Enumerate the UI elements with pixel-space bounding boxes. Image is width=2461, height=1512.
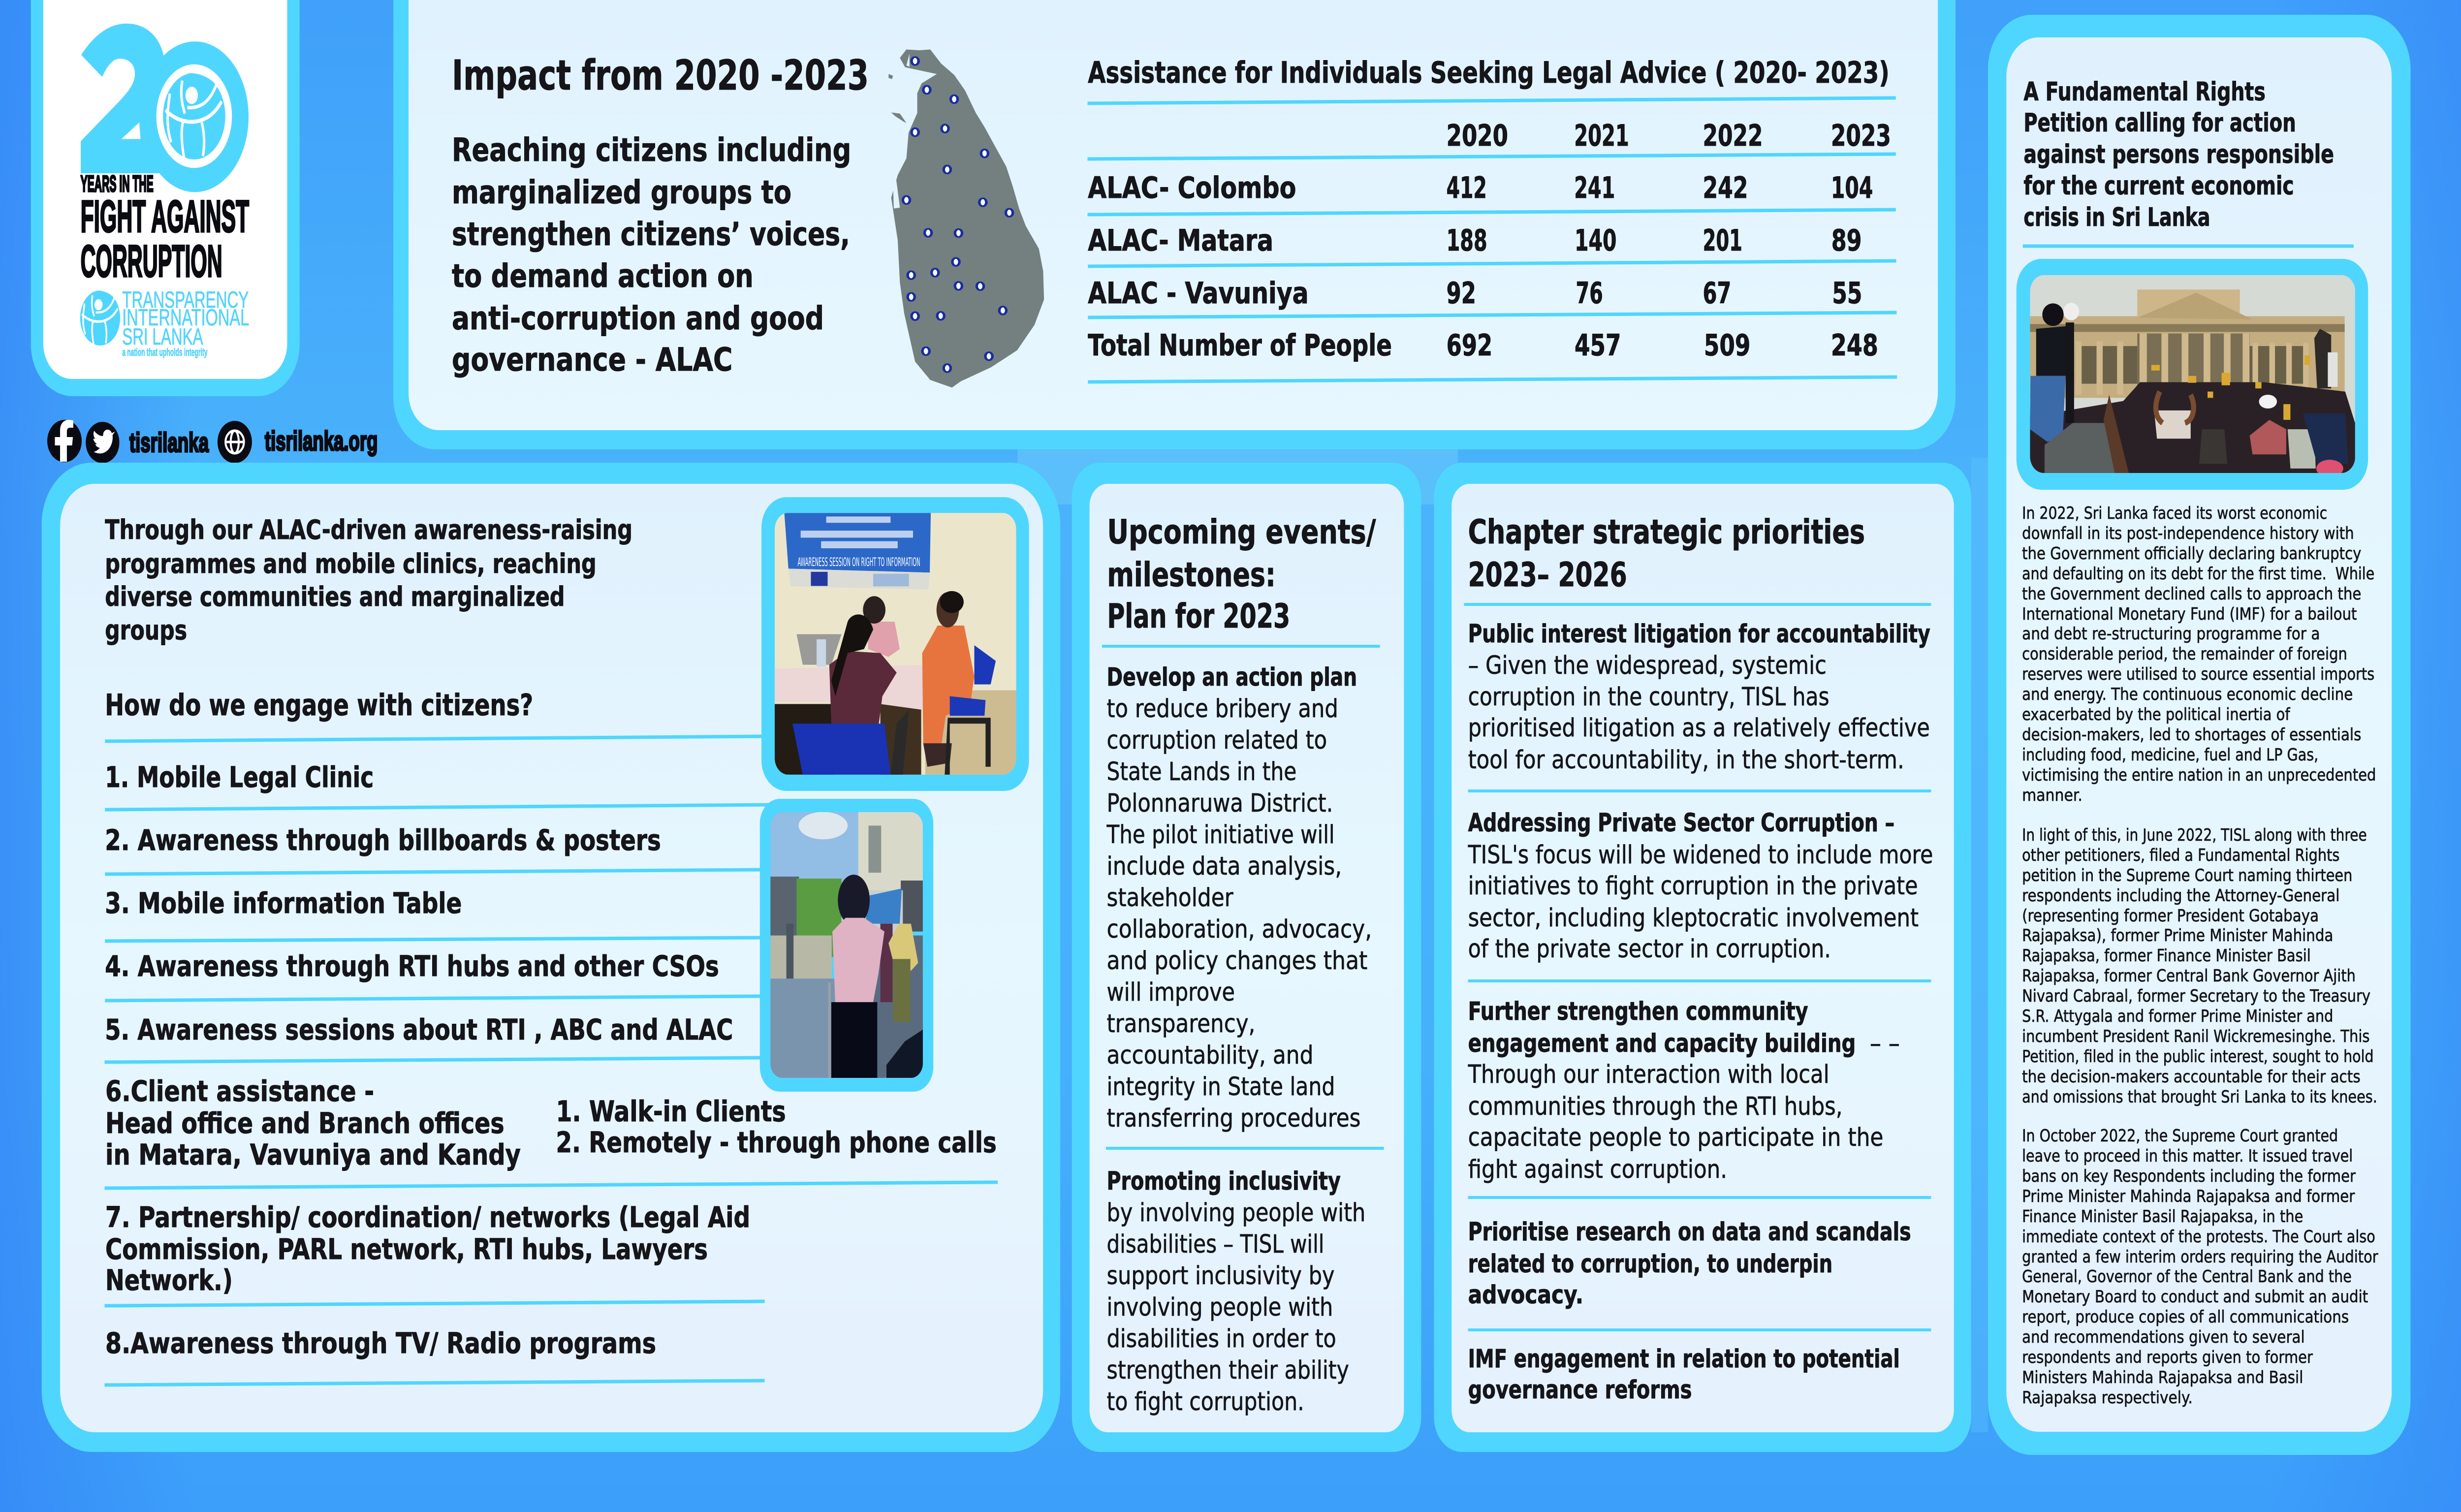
row: Vavuniya xyxy=(1088,276,1862,310)
text block: action plan: corruption related to xyxy=(1107,725,1327,755)
text block: action plan: collaboration, advocacy, xyxy=(1107,914,1372,944)
panel: upcoming events xyxy=(1072,463,1421,1452)
list: engagement channels: 4. Awareness through RTI hubs and other CSOs xyxy=(105,950,719,983)
text block: October 2022 ruling: Finance Minister Basil Rajapaksa, in the xyxy=(2022,1207,2303,1227)
text block: economic downfall: considerable period, the remainder of foreign xyxy=(2022,644,2347,664)
logo: 20 years: FIGHT AGAINST xyxy=(81,191,249,242)
social links xyxy=(47,420,378,463)
row: Matara: ALAC- Matara xyxy=(1088,223,1273,257)
priority: community engagement: Through our interaction with local xyxy=(1468,1060,1830,1089)
text block: intro xyxy=(105,514,632,646)
text block: action plan: transparency, xyxy=(1107,1009,1255,1038)
list: engagement channels: Head office and Branch offices xyxy=(105,1107,505,1140)
text block: promoting inclusivity: involving people with xyxy=(1107,1292,1333,1322)
list: engagement channels: 5. Awareness sessions about RTI , ABC and ALAC xyxy=(105,1013,733,1046)
list: engagement channels: in Matara, Vavuniya and Kandy xyxy=(105,1138,521,1171)
heading: petition: crisis in Sri Lanka xyxy=(2023,203,2210,232)
heading: upcoming events: milestones: xyxy=(1107,555,1276,594)
priority: IMF engagement: IMF engagement in relation to potential xyxy=(1468,1344,1900,1373)
list: engagement channels: 7. Partnership/ coordination/ networks (Legal Aid xyxy=(105,1201,750,1234)
text block: June 2022 petition: other petitioners, filed a Fundamental Rights xyxy=(2022,846,2339,865)
heading: impact: Impact from 2020 -2023 xyxy=(452,52,869,100)
website: tisrilanka.org xyxy=(265,426,378,456)
text block: October 2022 ruling: Ministers Mahinda Rajapaksa and Basil xyxy=(2022,1368,2303,1387)
text block: October 2022 ruling: Monetary Board to conduct and submit an audit xyxy=(2022,1287,2368,1307)
text block: economic downfall: and debt re-structuring programme for a xyxy=(2022,624,2320,644)
text block: economic downfall: In 2022, Sri Lanka faced its worst economic xyxy=(2022,504,2327,523)
text block: reaching citizens: Reaching citizens including xyxy=(452,131,851,168)
heading: chapter priorities xyxy=(1468,512,1865,594)
text block: reaching citizens xyxy=(452,131,851,378)
heading: how do we engage: How do we engage with citizens? xyxy=(105,688,533,722)
text block: October 2022 ruling: Rajapaksa respectively. xyxy=(2022,1388,2193,1408)
text block: reaching citizens: to demand action on xyxy=(452,257,754,294)
row: Vavuniya: 92 xyxy=(1447,276,1476,310)
text block: economic downfall: the Government officially declaring bankruptcy xyxy=(2022,544,2361,564)
row: total: 457 xyxy=(1575,328,1621,362)
row: Colombo: 104 xyxy=(1831,170,1873,205)
text block: October 2022 ruling: and recommendations given to several xyxy=(2022,1327,2305,1347)
text block: intro: Through our ALAC-driven awareness-raising xyxy=(105,514,632,545)
heading: chapter priorities: 2023– 2026 xyxy=(1468,555,1627,594)
heading: chapter priorities: Chapter strategic priorities xyxy=(1468,512,1865,551)
heading: petition xyxy=(2023,77,2334,232)
row: Colombo: 241 xyxy=(1574,170,1615,205)
text block: promoting inclusivity: Promoting inclusivity xyxy=(1107,1166,1341,1196)
text block: action plan: and policy changes that xyxy=(1107,946,1367,975)
row: Matara: 201 xyxy=(1703,223,1742,257)
text block: October 2022 ruling: granted a few interim orders requiring the Auditor xyxy=(2022,1247,2378,1267)
text block: intro: groups xyxy=(105,615,187,646)
text block: June 2022 petition: Rajapaksa, former Finance Minister Basil xyxy=(2022,946,2311,966)
priority: research: advocacy. xyxy=(1468,1280,1583,1309)
text block: action plan: State Lands in the xyxy=(1107,757,1296,786)
text block: promoting inclusivity: to fight corruption. xyxy=(1107,1387,1304,1416)
logo: 20 years: YEARS IN THE xyxy=(81,171,154,196)
text block: action plan: accountability, and xyxy=(1107,1040,1313,1070)
text block: promoting inclusivity: strengthen their ability xyxy=(1107,1355,1349,1385)
text block: October 2022 ruling: respondents and reports given to former xyxy=(2022,1348,2313,1367)
priority: public interest litigation: tool for accountability, in the short-term. xyxy=(1468,745,1904,774)
priority: public interest litigation xyxy=(1468,619,1930,774)
priority: IMF engagement xyxy=(1468,1344,1900,1404)
text block: action plan: Develop an action plan xyxy=(1107,662,1357,692)
priority: public interest litigation: Public interest litigation for accountability xyxy=(1468,619,1930,648)
row: total xyxy=(1088,328,1878,362)
priority: private sector corruption: of the private sector in corruption. xyxy=(1468,934,1831,963)
table header xyxy=(1447,118,1891,153)
priority: private sector corruption: TISL's focus will be widened to include more xyxy=(1468,840,1933,869)
text block: action plan: transferring procedures xyxy=(1107,1103,1360,1133)
row: Vavuniya: 67 xyxy=(1703,276,1731,310)
text block: economic downfall: downfall in its post-independence history with xyxy=(2022,524,2354,543)
row: Vavuniya: ALAC - Vavuniya xyxy=(1088,276,1309,310)
row: Matara: 188 xyxy=(1447,223,1487,257)
photo: mobile legal clinic xyxy=(761,497,1029,791)
list: engagement channels: Commission, PARL network, RTI hubs, Lawyers xyxy=(105,1233,708,1266)
text block: June 2022 petition: Petition, filed in the public interest, sought to hold xyxy=(2022,1047,2374,1067)
text block: promoting inclusivity: disabilities in order to xyxy=(1107,1324,1336,1353)
text block: action plan: will improve xyxy=(1107,977,1235,1007)
table header: 2020 xyxy=(1447,118,1508,153)
priority: private sector corruption: sector, including kleptocratic involvement xyxy=(1468,903,1919,932)
panel: engagement with citizens xyxy=(42,463,1060,1452)
text block: June 2022 petition: the decision-makers accountable for their acts xyxy=(2022,1067,2361,1087)
row: total: 509 xyxy=(1704,328,1750,362)
panel: fundamental rights petition xyxy=(1988,15,2410,1455)
priority: community engagement: Further strengthen community xyxy=(1468,997,1808,1026)
text block: June 2022 petition: incumbent President Ranil Wickremesinghe. This xyxy=(2022,1027,2369,1046)
text block: October 2022 ruling: report, produce copies of all communications xyxy=(2022,1307,2349,1327)
photo: protest at presidential secretariat xyxy=(2017,259,2368,490)
heading: upcoming events xyxy=(1107,512,1376,635)
panel: logo xyxy=(31,0,300,396)
text block: reaching citizens: governance - ALAC xyxy=(452,341,732,378)
list: engagement channels: 8.Awareness through TV/ Radio programs xyxy=(105,1327,656,1360)
row: Colombo: 412 xyxy=(1447,170,1487,205)
text block: action plan: The pilot initiative will xyxy=(1106,820,1335,849)
text block: October 2022 ruling xyxy=(2022,1126,2378,1408)
text block: economic downfall: the Government declined calls to approach the xyxy=(2022,584,2361,604)
logo: Transparency International Sri Lanka: INTERNATIONAL xyxy=(122,305,249,331)
icon: globe xyxy=(218,421,252,463)
list: engagement channels xyxy=(105,761,997,1360)
text block: action plan: stakeholder xyxy=(1107,883,1234,912)
text block: action plan: to reduce bribery and xyxy=(1107,694,1338,723)
row: Vavuniya: 55 xyxy=(1832,276,1862,310)
text block: action plan: integrity in State land xyxy=(1107,1072,1335,1101)
logo: 20 years xyxy=(81,24,249,286)
row: Matara: 89 xyxy=(1831,223,1862,257)
table header: 2022 xyxy=(1703,118,1763,153)
row: total: 248 xyxy=(1831,328,1878,362)
priority: community engagement: fight against corruption. xyxy=(1468,1155,1727,1184)
text block: economic downfall: manner. xyxy=(2022,786,2082,805)
row: Colombo xyxy=(1088,170,1873,205)
photo: awareness at office xyxy=(760,799,933,1092)
text block: economic downfall: victimising the entire nation in an unprecedented xyxy=(2022,765,2376,785)
text block: promoting inclusivity xyxy=(1107,1166,1365,1416)
priority: public interest litigation: corruption in the country, TISL has xyxy=(1468,682,1830,711)
text block: intro: diverse communities and marginalized xyxy=(105,581,565,612)
priority: private sector corruption xyxy=(1468,808,1933,963)
text block: economic downfall: including food, medicine, fuel and LP Gas, xyxy=(2022,745,2318,765)
text block: October 2022 ruling: immediate context of the protests. The Court also xyxy=(2022,1227,2375,1247)
list: engagement channels: 6.Client assistance - xyxy=(105,1075,374,1108)
row: Matara: 140 xyxy=(1575,223,1617,257)
heading: petition: Petition calling for action xyxy=(2023,108,2296,138)
row: Vavuniya: 76 xyxy=(1576,276,1603,310)
text block: October 2022 ruling: Prime Minister Mahinda Rajapaksa and former xyxy=(2022,1187,2355,1206)
map: Sri Lanka with ALAC points xyxy=(888,49,1044,388)
text block: economic downfall: International Monetary Fund (IMF) for a bailout xyxy=(2022,604,2357,624)
text block: June 2022 petition: Rajapaksa, former Central Bank Governor Ajith xyxy=(2022,966,2356,986)
text block: October 2022 ruling: bans on key Respondents including the former xyxy=(2022,1166,2356,1186)
table header: 2021 xyxy=(1574,118,1629,153)
panel: chapter strategic priorities xyxy=(1434,463,1971,1452)
text block: action plan: include data analysis, xyxy=(1107,851,1342,881)
table: assistance for individuals xyxy=(1087,55,1897,382)
priority: community engagement: engagement and capacity building xyxy=(1468,1029,1856,1058)
row: Matara xyxy=(1088,223,1862,257)
panel: impact 2020-2023 xyxy=(393,0,1956,449)
text block: October 2022 ruling: leave to proceed in this matter. It issued travel xyxy=(2022,1146,2353,1166)
text block: June 2022 petition: and omissions that brought Sri Lanka to its knees. xyxy=(2022,1087,2377,1107)
list: engagement channels: Network.) xyxy=(105,1264,233,1297)
text block: economic downfall: and energy. The continuous economic decline xyxy=(2022,685,2353,704)
logo: Transparency International Sri Lanka: TRANSPARENCY xyxy=(122,287,249,313)
text block: June 2022 petition xyxy=(2022,825,2377,1107)
text block: economic downfall xyxy=(2022,504,2376,805)
heading: petition: A Fundamental Rights xyxy=(2023,77,2266,107)
text block: intro: programmes and mobile clinics, reaching xyxy=(105,548,597,579)
heading: upcoming events: Upcoming events/ xyxy=(1107,512,1376,551)
text block: reaching citizens: anti-corruption and good xyxy=(452,300,824,337)
table header: 2023 xyxy=(1831,118,1891,153)
list: engagement channels: 2. Remotely - through phone calls xyxy=(556,1126,997,1159)
priority: community engagement: – – xyxy=(1870,1029,1900,1058)
text block: economic downfall: exacerbated by the political inertia of xyxy=(2022,705,2291,724)
text block: October 2022 ruling: In October 2022, the Supreme Court granted xyxy=(2022,1126,2338,1146)
text block: June 2022 petition: S.R. Attygala and former Prime Minister and xyxy=(2022,1007,2333,1026)
priority: IMF engagement: governance reforms xyxy=(1468,1375,1692,1404)
priority: private sector corruption: initiatives to fight corruption in the private xyxy=(1468,871,1918,900)
list: engagement channels: 1. Mobile Legal Clinic xyxy=(105,761,374,794)
text block: promoting inclusivity: disabilities – TISL will xyxy=(1107,1229,1324,1259)
text block: promoting inclusivity: support inclusivity by xyxy=(1107,1261,1335,1290)
photo: mobile legal clinic: AWARENESS SESSION ON RIGHT TO INFORMATION xyxy=(797,556,920,569)
list: engagement channels: 3. Mobile information Table xyxy=(105,887,462,920)
list: engagement channels: 1. Walk-in Clients xyxy=(556,1095,786,1128)
priority: research: related to corruption, to underpin xyxy=(1468,1249,1832,1278)
icon: twitter xyxy=(86,422,120,463)
text block: June 2022 petition: Nivard Cabraal, former Secretary to the Treasury xyxy=(2022,986,2370,1006)
text block: reaching citizens: strengthen citizens’ voices, xyxy=(452,216,850,252)
text block: June 2022 petition: In light of this, in June 2022, TISL along with three xyxy=(2022,825,2367,845)
logo: Transparency International Sri Lanka xyxy=(80,287,249,358)
priority: community engagement: communities through the RTI hubs, xyxy=(1468,1092,1842,1121)
handle: tisrilanka xyxy=(129,427,209,458)
priority: research: Prioritise research on data and scandals xyxy=(1468,1217,1911,1246)
row: total: Total Number of People xyxy=(1088,328,1392,362)
priority: community engagement: capacitate people to participate in the xyxy=(1468,1123,1883,1152)
text block: June 2022 petition: petition in the Supreme Court naming thirteen xyxy=(2022,866,2352,885)
logo: 20 years: CORRUPTION xyxy=(81,236,222,286)
heading: petition: for the current economic xyxy=(2023,171,2294,201)
row: Colombo: ALAC- Colombo xyxy=(1088,170,1296,205)
text block: promoting inclusivity: by involving people with xyxy=(1107,1198,1365,1227)
text block: economic downfall: and defaulting on its debt for the first time. While xyxy=(2022,564,2374,584)
logo: Transparency International Sri Lanka: SRI LANKA xyxy=(122,324,203,350)
priority: public interest litigation: prioritised litigation as a relatively effective xyxy=(1468,713,1930,742)
text block: economic downfall: reserves were utilised to source essential imports xyxy=(2022,664,2374,684)
priority: private sector corruption: Addressing Private Sector Corruption – xyxy=(1468,808,1894,837)
priority: public interest litigation: – Given the widespread, systemic xyxy=(1468,651,1827,680)
row: total: 692 xyxy=(1447,328,1492,362)
text block: June 2022 petition: Rajapaksa), former Prime Minister Mahinda xyxy=(2022,926,2333,945)
list: engagement channels: 2. Awareness through billboards & posters xyxy=(105,824,661,857)
text block: action plan xyxy=(1106,662,1372,1133)
row: Colombo: 242 xyxy=(1703,170,1748,205)
text block: October 2022 ruling: General, Governor of the Central Bank and the xyxy=(2022,1267,2352,1287)
table title: Assistance for Individuals Seeking Legal Advice ( 2020- 2023) xyxy=(1088,55,1890,90)
priority: community engagement xyxy=(1468,997,1900,1184)
text block: action plan: Polonnaruwa District. xyxy=(1107,788,1333,818)
text block: June 2022 petition: (representing former President Gotabaya xyxy=(2022,906,2319,926)
logo: Transparency International Sri Lanka: a nation that upholds integrity xyxy=(122,346,208,358)
heading: petition: against persons responsible xyxy=(2023,140,2334,169)
text block: June 2022 petition: respondents including the Attorney-General xyxy=(2022,886,2339,906)
priority: research xyxy=(1468,1217,1911,1309)
heading: upcoming events: Plan for 2023 xyxy=(1107,596,1290,635)
icon: facebook xyxy=(47,420,82,462)
text block: economic downfall: decision-makers, led to shortages of essentials xyxy=(2022,725,2361,745)
text block: reaching citizens: marginalized groups to xyxy=(452,174,791,211)
